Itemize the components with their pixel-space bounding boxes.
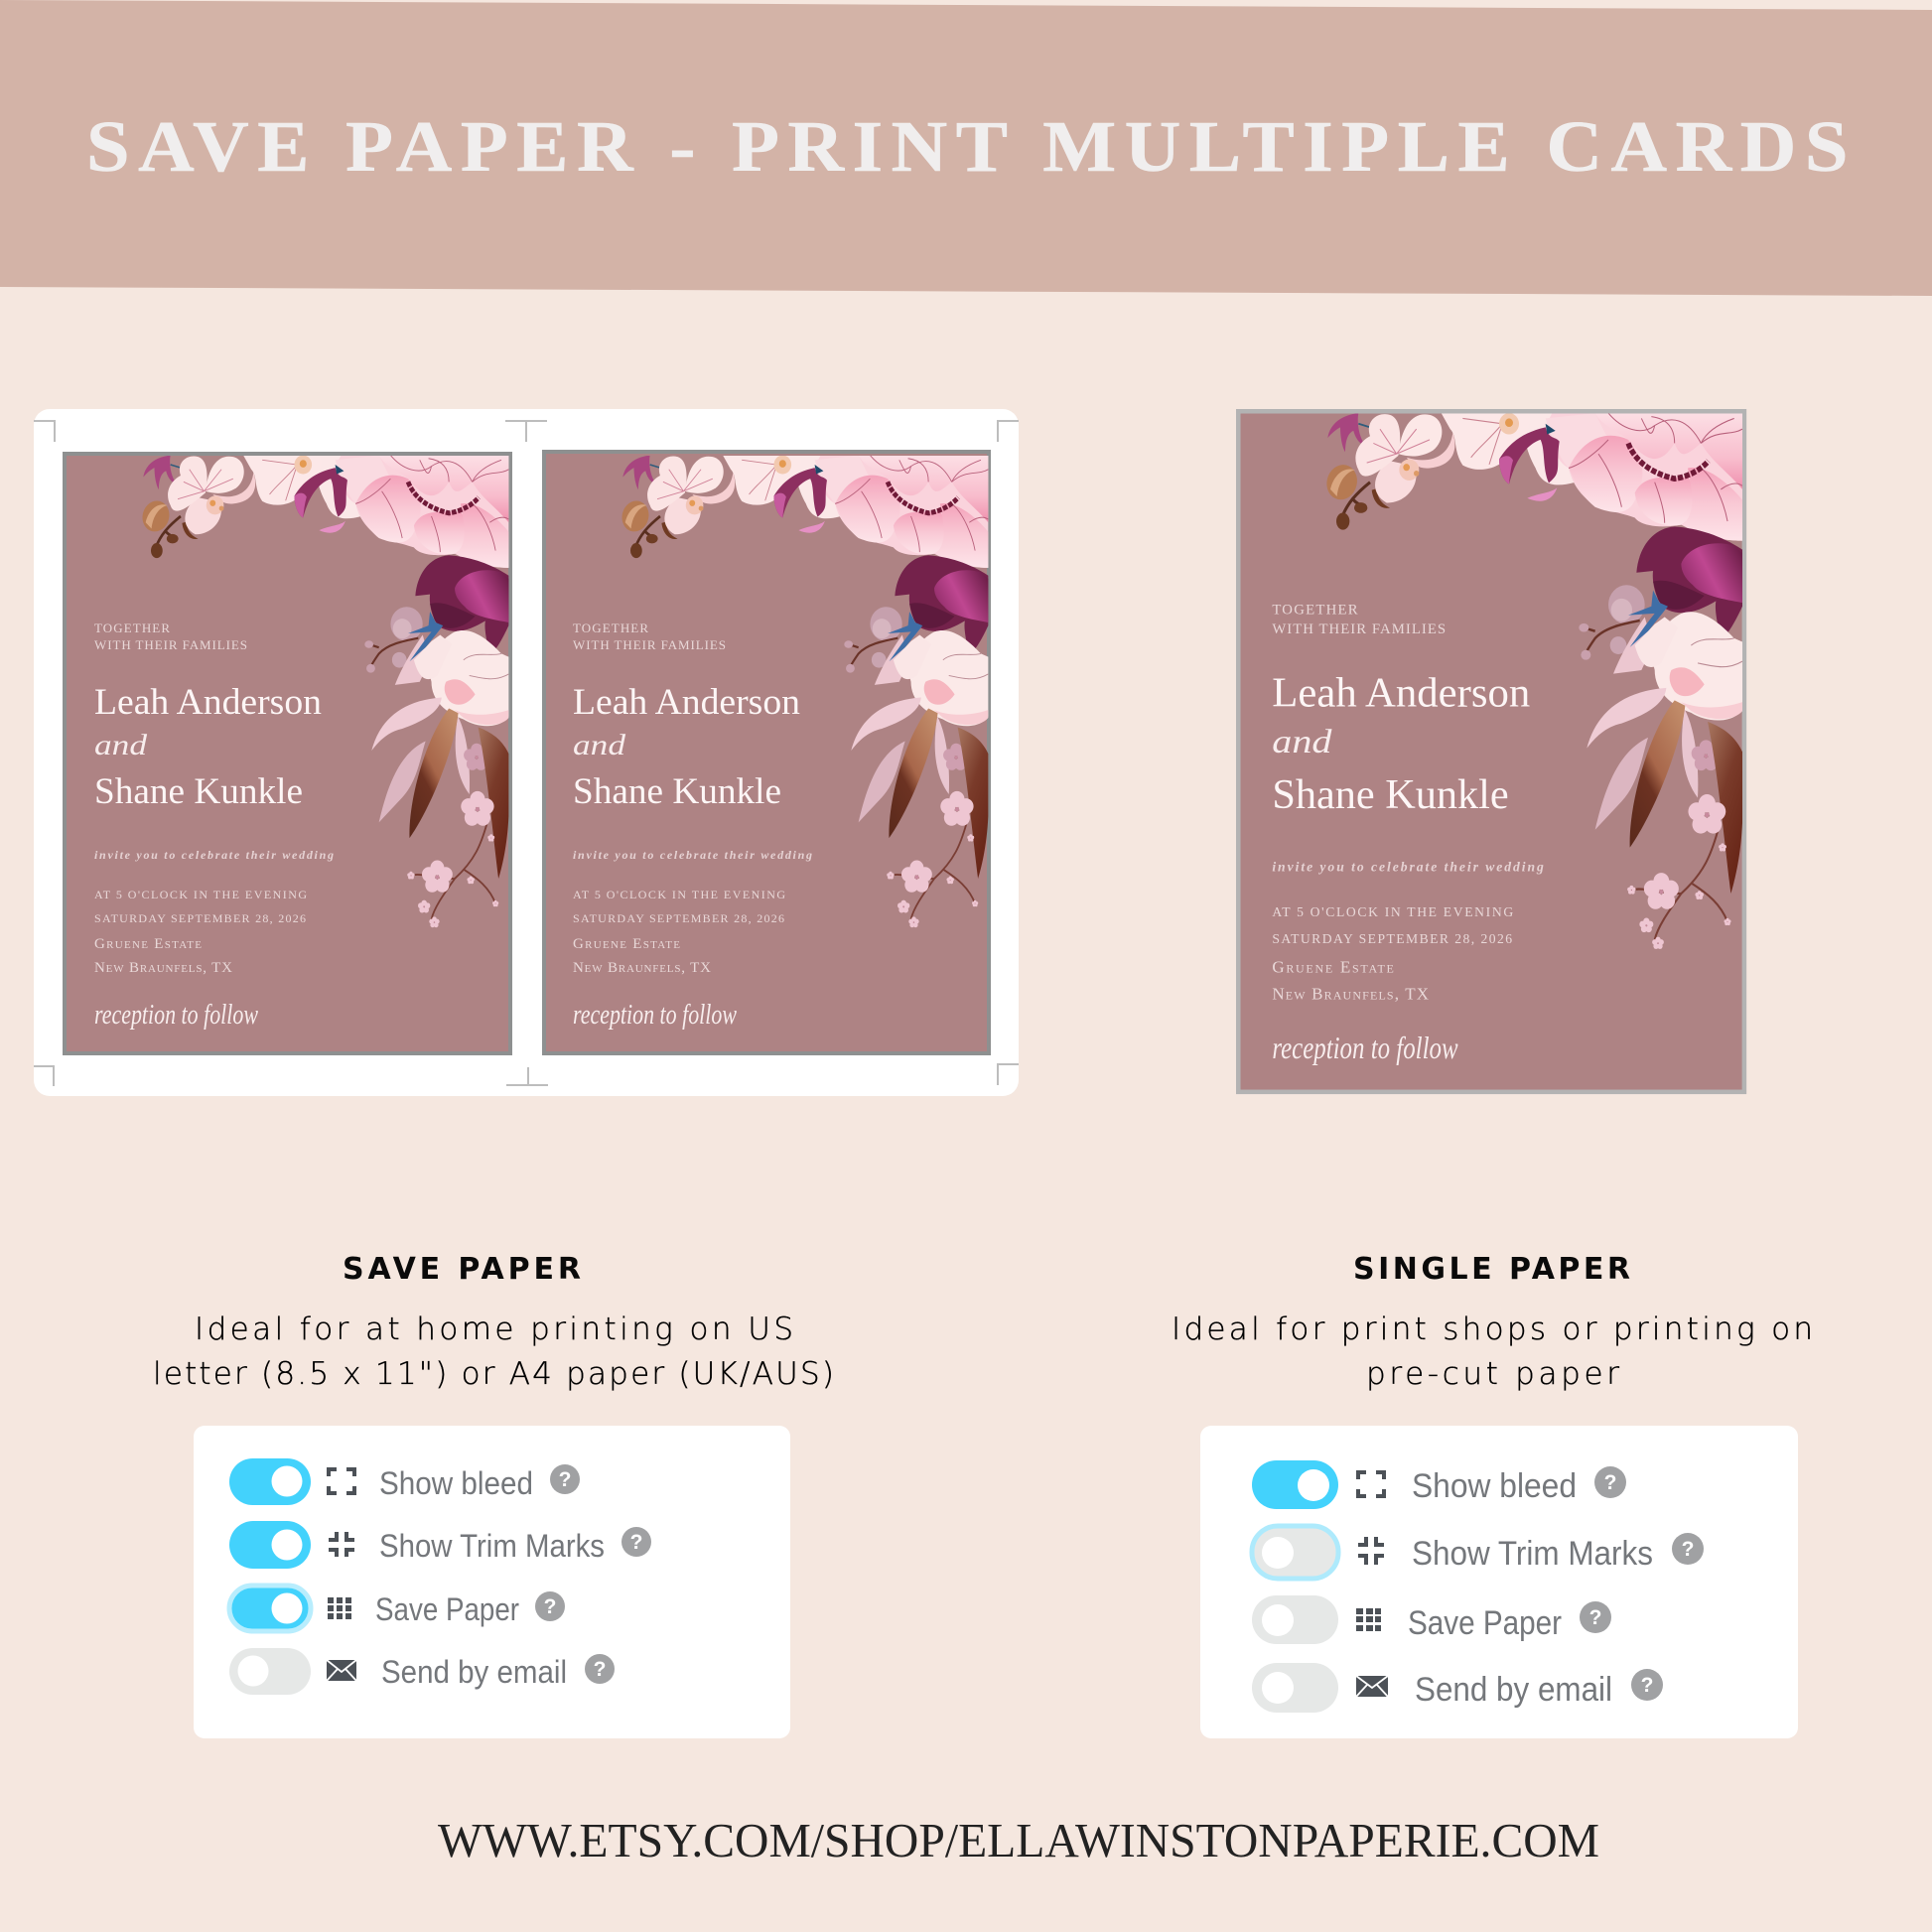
row: send by email [1252, 1663, 1663, 1713]
single card text: Gruene Estate [1272, 958, 1394, 976]
card 2 text: and [573, 729, 626, 761]
card 2 text: SATURDAY SEPTEMBER 28, 2026 [573, 911, 784, 925]
header banner [0, 0, 1932, 296]
footer url: WWW.ETSY.COM/SHOP/ELLAWINSTONPAPERIE.COM [438, 1813, 1599, 1867]
card 1 text: New Braunfels, TX [94, 960, 232, 976]
heading: single paper: SINGLE PAPER [1353, 1252, 1630, 1287]
row: send by email: ? [594, 1658, 606, 1681]
row: send by email: Send by email [381, 1654, 567, 1690]
crop marks [34, 421, 1019, 1086]
panel: single card [1238, 411, 1744, 1092]
card 1 text: Leah Anderson [94, 682, 322, 723]
single card text: invite you to celebrate their wedding [1272, 859, 1544, 874]
row: send by email: Send by email [1415, 1671, 1612, 1709]
row: show trim marks: Show Trim Marks [1412, 1535, 1653, 1573]
text block: save paper [153, 1252, 834, 1392]
panel: save paper print sheet [34, 409, 1019, 1096]
card 1 text: reception to follow [94, 1000, 258, 1031]
card 2 text: New Braunfels, TX [573, 960, 711, 976]
card 2 text: reception to follow [573, 1000, 737, 1031]
description: single paper [1172, 1311, 1813, 1392]
row: show bleed: ? [559, 1468, 571, 1491]
card 2 text: Leah Anderson [573, 682, 800, 723]
card 2 text: Gruene Estate [573, 936, 680, 952]
card 1 text: SATURDAY SEPTEMBER 28, 2026 [94, 911, 306, 925]
card 2 text: Shane Kunkle [573, 771, 781, 812]
description: save paper: Ideal for at home printing on US [195, 1311, 793, 1347]
card 2 text: TOGETHER [573, 621, 649, 635]
single card text: and [1272, 724, 1333, 760]
row: show bleed [229, 1458, 580, 1505]
floral corner [1321, 413, 1742, 949]
title: SAVE PAPER - PRINT MULTIPLE CARDS [86, 106, 1857, 187]
single card text: Leah Anderson [1272, 670, 1530, 717]
panel: save paper settings [194, 1426, 790, 1738]
row: send by email: ? [1641, 1674, 1653, 1697]
floral corner [138, 456, 508, 927]
description: save paper [153, 1311, 834, 1392]
single card text: WITH THEIR FAMILIES [1272, 621, 1447, 637]
card 1 text [94, 621, 334, 1031]
row: save paper [229, 1586, 565, 1631]
heading: save paper: SAVE PAPER [343, 1252, 581, 1287]
description: single paper: Ideal for print shops or printing on [1172, 1311, 1813, 1347]
card 1 text: WITH THEIR FAMILIES [94, 637, 248, 652]
card 1 text: and [94, 729, 148, 761]
card 2 text [573, 621, 812, 1031]
row: save paper: ? [544, 1595, 556, 1618]
card 1 text: invite you to celebrate their wedding [94, 848, 334, 862]
row: show bleed [1252, 1460, 1626, 1509]
card 1 text: AT 5 O'CLOCK IN THE EVENING [94, 888, 307, 901]
single card text: SATURDAY SEPTEMBER 28, 2026 [1272, 931, 1512, 946]
card 2 text: invite you to celebrate their wedding [573, 848, 812, 862]
row: save paper: ? [1589, 1606, 1601, 1629]
row: show trim marks [229, 1521, 651, 1569]
single card text: reception to follow [1272, 1031, 1458, 1065]
row: show bleed: Show bleed [1412, 1467, 1577, 1505]
text block: single paper [1172, 1252, 1813, 1392]
row: show bleed: ? [1604, 1471, 1616, 1494]
row: save paper [1252, 1595, 1611, 1644]
panel: single paper settings [1200, 1426, 1798, 1738]
row: save paper: Save Paper [1408, 1604, 1562, 1642]
card 2 text: AT 5 O'CLOCK IN THE EVENING [573, 888, 785, 901]
card 1 text: TOGETHER [94, 621, 171, 635]
card 1 text: Gruene Estate [94, 936, 202, 952]
single card text: New Braunfels, TX [1272, 985, 1429, 1004]
description: single paper: pre-cut paper [1366, 1356, 1619, 1392]
single card text: AT 5 O'CLOCK IN THE EVENING [1272, 904, 1513, 919]
row: show trim marks: ? [630, 1531, 642, 1554]
single card text: TOGETHER [1272, 603, 1359, 619]
floral corner [618, 456, 988, 927]
card 1 text: Shane Kunkle [94, 771, 303, 812]
row: show trim marks [1252, 1526, 1704, 1579]
row: send by email [229, 1648, 615, 1695]
card 1 [65, 454, 510, 1053]
row: save paper: Save Paper [375, 1591, 519, 1627]
card 2 [544, 452, 989, 1053]
single card text [1272, 603, 1544, 1065]
description: save paper: letter (8.5 x 11") or A4 paper (UK/AUS) [153, 1356, 834, 1392]
row: show trim marks: Show Trim Marks [379, 1528, 605, 1564]
row: show bleed: Show bleed [379, 1465, 533, 1501]
single card text: Shane Kunkle [1272, 771, 1509, 818]
row: show trim marks: ? [1682, 1538, 1694, 1561]
card 2 text: WITH THEIR FAMILIES [573, 637, 727, 652]
